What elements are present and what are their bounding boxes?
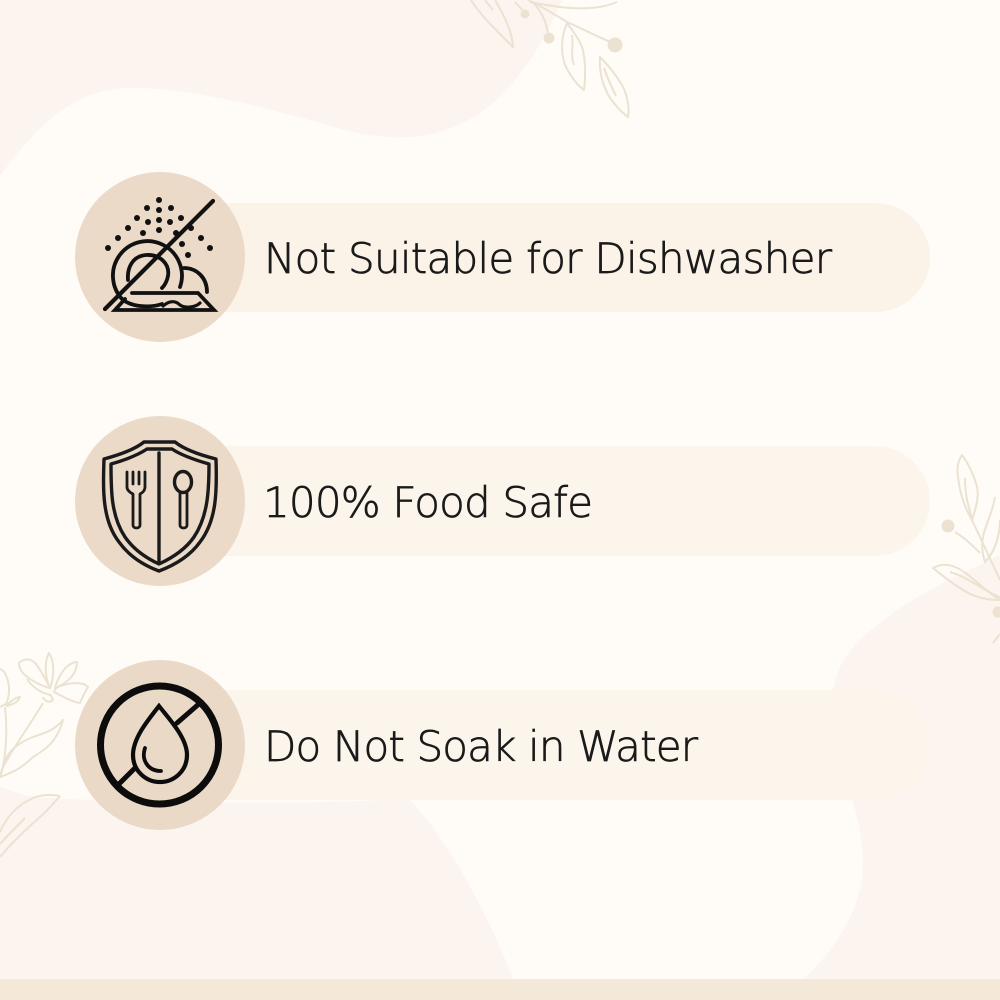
- row 1: not suitable for dishwasher: [75, 172, 930, 342]
- badge 1: [75, 172, 245, 342]
- floral sprig: right: [933, 455, 1000, 643]
- icon: crossed out water drop: [100, 686, 218, 804]
- bottom band: [0, 979, 1000, 1000]
- icon: dishes crossed out: [105, 201, 214, 310]
- badge 2: [75, 416, 245, 586]
- icon: water spray dots: [105, 197, 213, 258]
- background blob: top left: [0, 0, 562, 176]
- row 2: food safe: [75, 416, 930, 586]
- label 2: 100% Food Safe: [263, 478, 593, 527]
- row 3: do not soak: [75, 660, 930, 830]
- icon: shield with fork and spoon: [104, 442, 216, 571]
- floral sprig: top centre: [471, 0, 629, 117]
- floral sprig: left: [0, 653, 88, 857]
- background blob: right: [802, 555, 1000, 980]
- pill 3: [160, 690, 930, 800]
- pill 1: [160, 203, 930, 312]
- label 1: Not Suitable for Dishwasher: [264, 234, 833, 283]
- background blob: bottom left: [0, 787, 514, 980]
- badge 3: [75, 660, 245, 830]
- pill 2: [160, 446, 930, 556]
- label 3: Do Not Soak in Water: [264, 722, 699, 771]
